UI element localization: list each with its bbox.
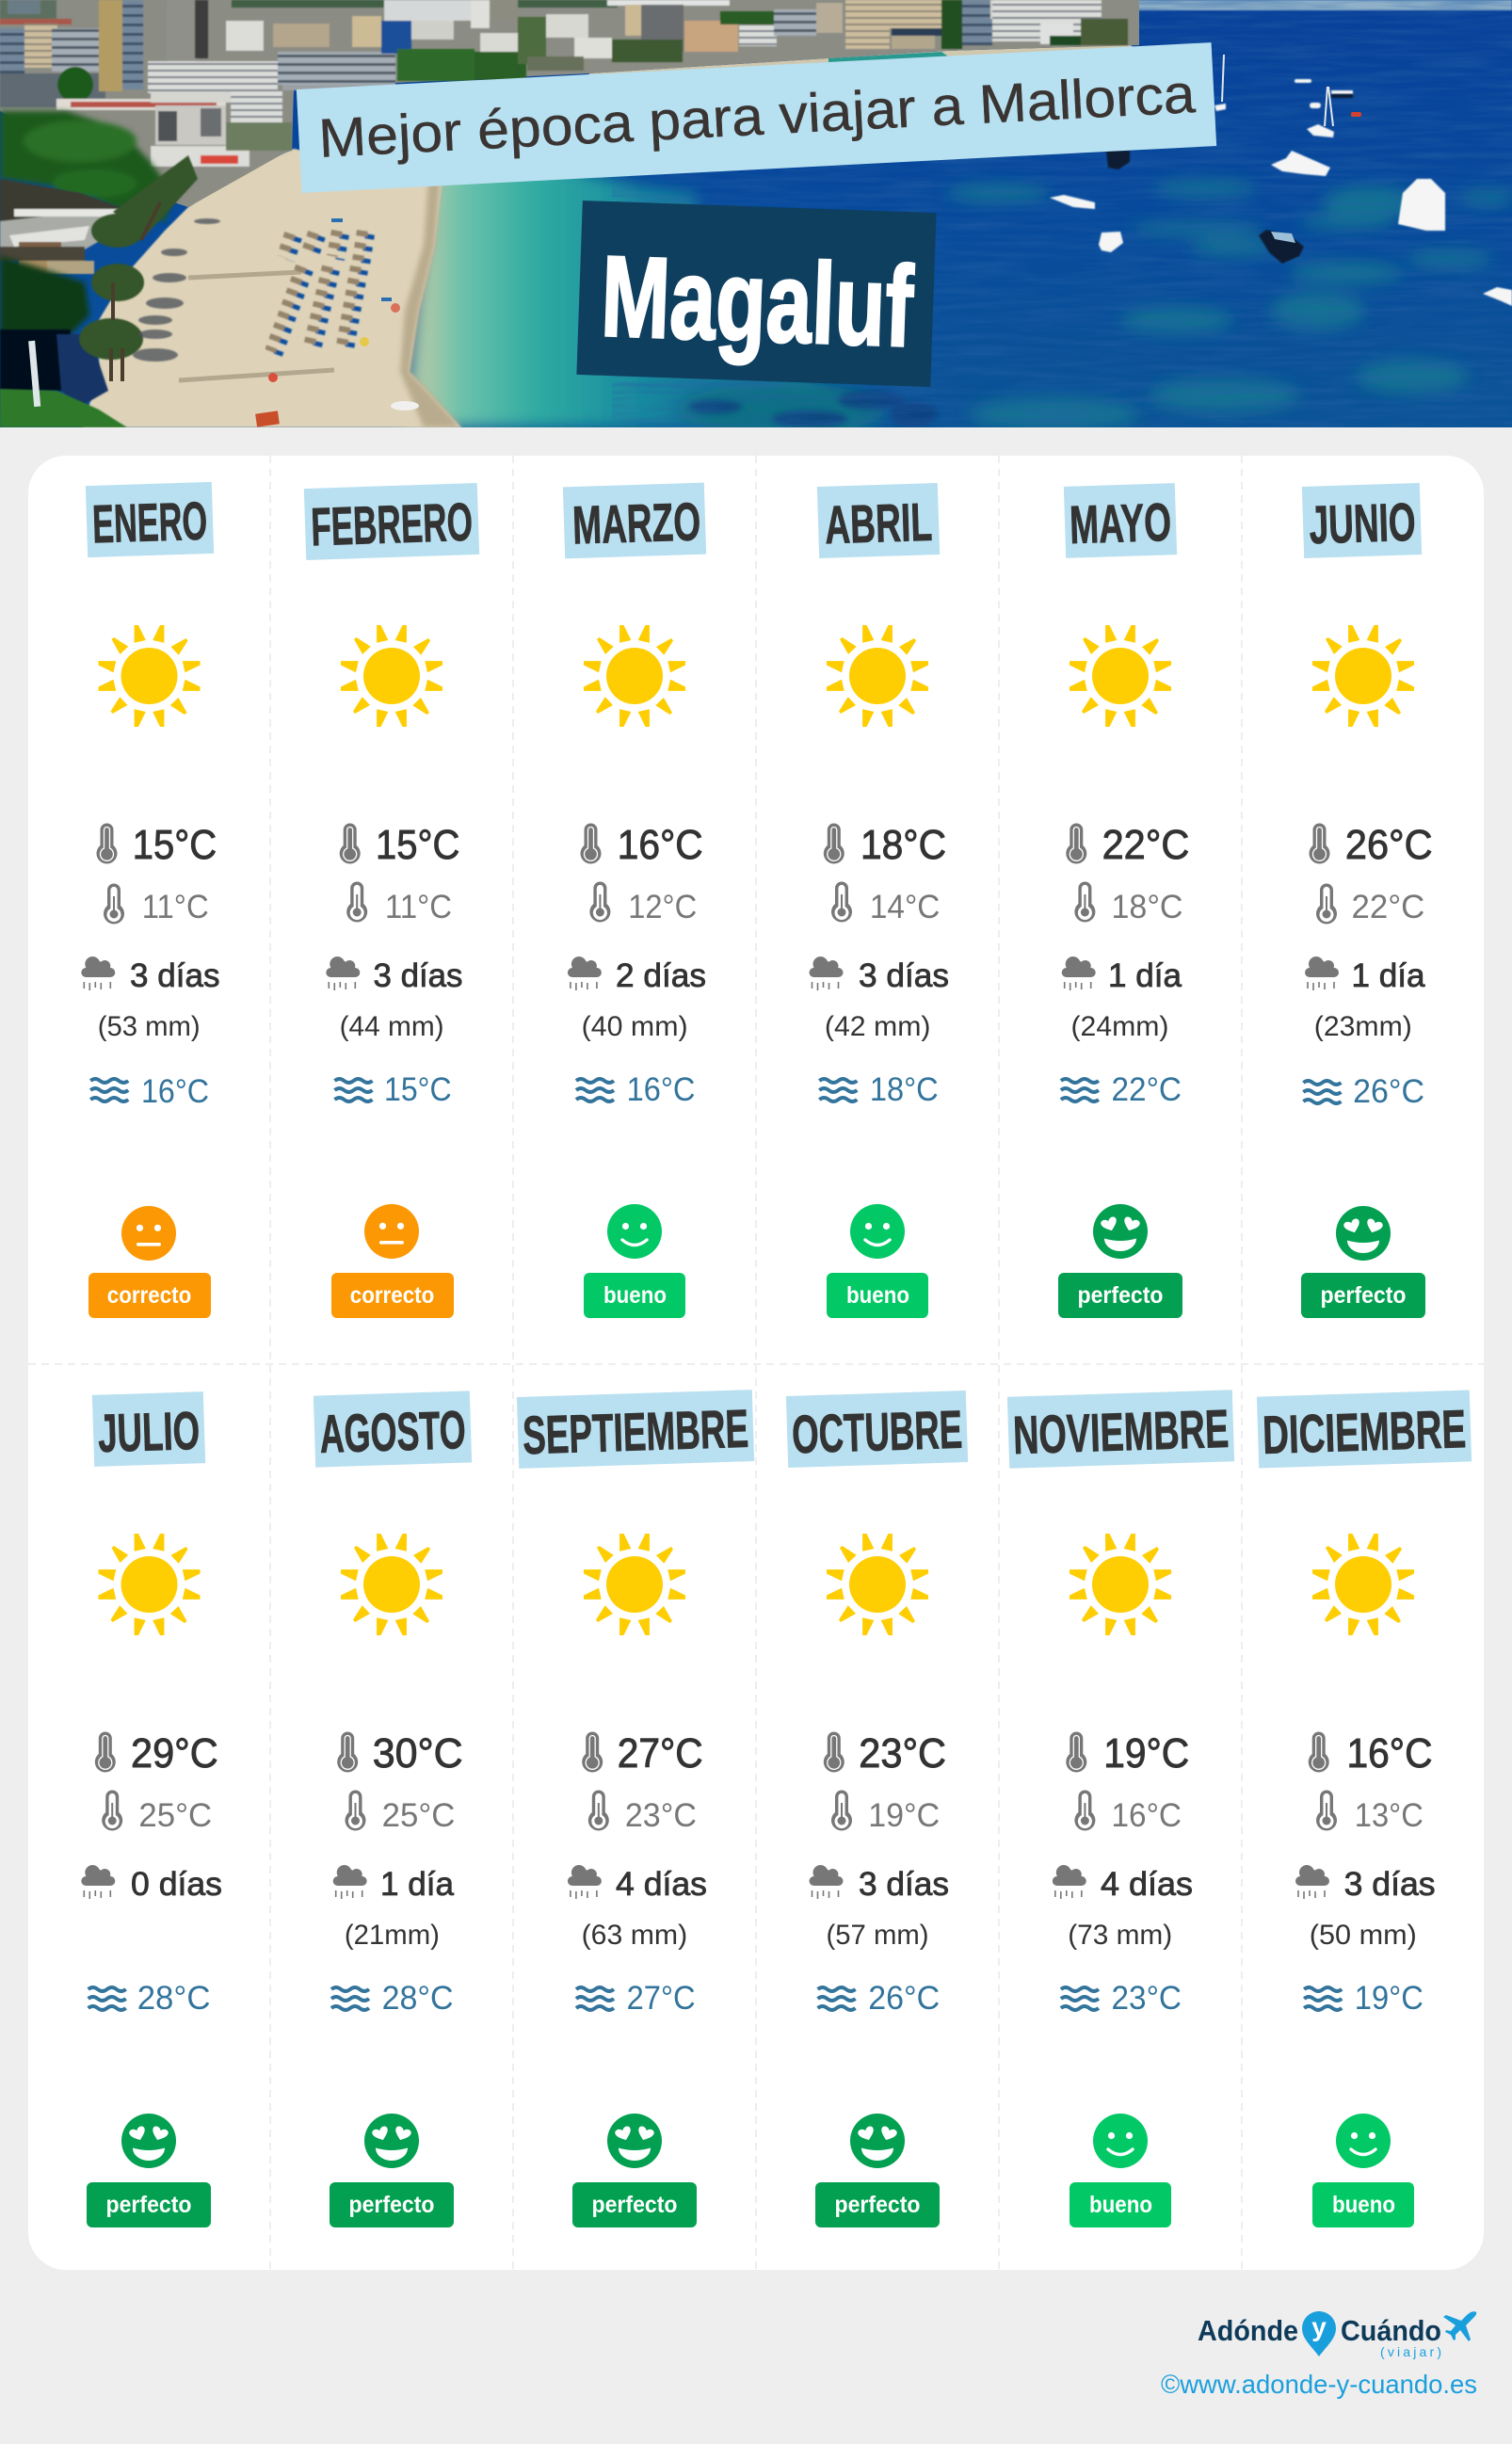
- rainy days: [568, 1865, 707, 1903]
- footer logo: Cuándo: [1341, 2314, 1441, 2347]
- sea temperature: [331, 1980, 454, 2017]
- min temperature: 18°C: [1111, 889, 1182, 925]
- rainy days: 1 día: [380, 1866, 455, 1903]
- rainy days: [1062, 957, 1182, 994]
- max temperature: 18°C: [861, 822, 946, 868]
- min temperature: 25°C: [382, 1797, 455, 1834]
- rating pill: [1301, 1273, 1425, 1318]
- rating pill: perfecto: [1320, 1282, 1407, 1309]
- rainy days: [81, 957, 220, 994]
- footer logo: Adónde: [1198, 2314, 1298, 2347]
- icon: sun: [341, 625, 442, 727]
- min temperature: [589, 881, 697, 925]
- month column: septiembre: [517, 1390, 754, 2227]
- rating face: [1093, 1204, 1148, 1259]
- month label: [786, 1391, 968, 1468]
- sea temperature: 15°C: [384, 1071, 452, 1108]
- max temperature: [824, 1730, 946, 1777]
- icon: sun: [1070, 1534, 1171, 1635]
- max temperature: [340, 822, 459, 868]
- rainy days: [1053, 1865, 1193, 1903]
- max temperature: 23°C: [859, 1730, 946, 1777]
- rating pill: correcto: [350, 1282, 434, 1309]
- max temperature: [582, 1730, 703, 1777]
- month column: agosto: [314, 1391, 472, 2227]
- max temperature: [1066, 1730, 1189, 1777]
- rainy days: [326, 957, 463, 994]
- sea temperature: [1061, 1980, 1182, 2017]
- min temperature: 25°C: [138, 1797, 212, 1834]
- sea temperature: 22°C: [1111, 1071, 1182, 1108]
- icon: sun: [584, 625, 685, 727]
- sea temperature: 26°C: [1353, 1073, 1424, 1110]
- min temperature: 16°C: [1111, 1797, 1182, 1834]
- rating pill: perfecto: [834, 2192, 921, 2218]
- month column: octubre: [786, 1391, 968, 2227]
- max temperature: [96, 822, 217, 868]
- icon: sun: [827, 625, 928, 727]
- rating face: [607, 2114, 662, 2168]
- rainfall: (57 mm): [827, 1920, 928, 1951]
- sea temperature: [1061, 1071, 1182, 1108]
- month label: [563, 483, 706, 558]
- icon: sun: [1312, 1534, 1414, 1635]
- max temperature: [580, 822, 703, 868]
- icon: sun: [341, 1534, 442, 1635]
- rating face: [1336, 2114, 1391, 2168]
- footer logo: (viajar): [1380, 2344, 1441, 2359]
- sea temperature: 28°C: [137, 1980, 211, 2017]
- rating face: [607, 1204, 662, 1259]
- sea temperature: [576, 1071, 695, 1108]
- rating pill: perfecto: [105, 2192, 192, 2218]
- rainy days: 3 días: [859, 1866, 949, 1903]
- rainfall: (73 mm): [1068, 1920, 1172, 1951]
- sea temperature: 18°C: [870, 1071, 939, 1108]
- min temperature: 14°C: [870, 889, 940, 925]
- min temperature: [102, 1791, 212, 1834]
- sea temperature: [1303, 1073, 1424, 1110]
- rainy days: 2 días: [616, 957, 706, 994]
- rainfall: (63 mm): [582, 1920, 687, 1951]
- rainy days: 4 días: [1101, 1866, 1193, 1903]
- rating pill: [572, 2182, 697, 2227]
- rainfall: (40 mm): [582, 1011, 688, 1042]
- rainfall: (24mm): [1071, 1011, 1169, 1042]
- rating face: [850, 1204, 905, 1259]
- rating pill: [827, 1273, 928, 1318]
- sea temperature: 28°C: [382, 1980, 454, 2017]
- rainy days: [81, 1865, 222, 1903]
- min temperature: [831, 881, 940, 925]
- rating pill: perfecto: [348, 2192, 435, 2218]
- sea temperature: [335, 1071, 452, 1108]
- rating face: [364, 1204, 419, 1259]
- rating face: [1093, 2114, 1148, 2168]
- min temperature: 11°C: [385, 889, 452, 925]
- max temperature: 16°C: [618, 822, 703, 868]
- max temperature: [824, 822, 946, 868]
- subtitle banner: Mejor época para viajar a Mallorca: [317, 63, 1198, 169]
- icon: sun: [584, 1534, 685, 1635]
- hero photo: Magaluf beach: [0, 0, 1512, 436]
- icon: sun: [98, 1534, 200, 1635]
- month column: enero: [81, 482, 220, 1318]
- rainy days: [810, 957, 949, 994]
- rating pill: [815, 2182, 940, 2227]
- min temperature: [831, 1791, 940, 1834]
- sea temperature: 16°C: [627, 1071, 695, 1108]
- month label: SEPTIEMBRE: [522, 1399, 749, 1466]
- rating pill: [1070, 2182, 1171, 2227]
- month label: [1064, 483, 1177, 558]
- rainy days: 1 día: [1352, 957, 1425, 994]
- sea temperature: 16°C: [141, 1073, 209, 1110]
- icon: sun: [98, 625, 200, 727]
- rating face: [364, 2114, 419, 2168]
- rating pill: [584, 1273, 685, 1318]
- sea temperature: [819, 1071, 939, 1108]
- icon: sun: [827, 1534, 928, 1635]
- rating face: [121, 2114, 176, 2168]
- min temperature: [1316, 883, 1424, 925]
- min temperature: [345, 1791, 455, 1834]
- icon: map pin: y: [1311, 2312, 1327, 2341]
- title banner: [576, 201, 937, 387]
- month label: [86, 482, 214, 557]
- icon: plane: [1443, 2311, 1476, 2341]
- rating pill: perfecto: [591, 2192, 678, 2218]
- rating pill: [331, 1273, 454, 1318]
- max temperature: 22°C: [1102, 822, 1189, 868]
- month column: julio: [81, 1391, 222, 2227]
- month label: [817, 483, 940, 558]
- month label: JUNIO: [1309, 492, 1417, 555]
- min temperature: 22°C: [1352, 889, 1424, 925]
- sea temperature: [90, 1073, 209, 1110]
- month column: marzo: [563, 483, 706, 1318]
- rainfall: (23mm): [1314, 1011, 1412, 1042]
- max temperature: [1309, 1730, 1433, 1777]
- month label: [1007, 1390, 1234, 1469]
- max temperature: 15°C: [376, 822, 459, 868]
- rating face: [1336, 1206, 1391, 1261]
- month label: [1302, 483, 1422, 558]
- sea temperature: 26°C: [868, 1980, 940, 2017]
- max temperature: 16°C: [1346, 1730, 1433, 1777]
- rainfall: (50 mm): [1310, 1920, 1417, 1951]
- sea temperature: [576, 1980, 696, 2017]
- rainy days: [810, 1865, 949, 1903]
- min temperature: [588, 1791, 697, 1834]
- rating pill: bueno: [603, 1282, 667, 1309]
- month label: [304, 483, 479, 560]
- month column: mayo: [1058, 483, 1189, 1318]
- rainy days: 3 días: [373, 957, 463, 994]
- month label: ABRIL: [824, 492, 933, 555]
- month label: AGOSTO: [319, 1400, 467, 1465]
- rating pill: perfecto: [1077, 1282, 1164, 1309]
- sea temperature: [88, 1980, 211, 2017]
- month label: NOVIEMBRE: [1012, 1399, 1230, 1466]
- sea temperature: [1304, 1980, 1424, 2017]
- min temperature: [1316, 1791, 1424, 1834]
- month column: abril: [810, 483, 949, 1318]
- month column: diciembre: [1257, 1390, 1472, 2227]
- min temperature: [1074, 1791, 1182, 1834]
- sea temperature: 27°C: [627, 1980, 696, 2017]
- month label: MARZO: [571, 491, 701, 556]
- min temperature: 11°C: [142, 889, 209, 925]
- rainy days: [333, 1865, 455, 1903]
- max temperature: [95, 1730, 218, 1777]
- min temperature: [1074, 881, 1182, 925]
- month label: [517, 1390, 754, 1469]
- footer url: ©www.adonde-y-cuando.es: [1161, 2370, 1477, 2399]
- rating pill: [88, 1273, 211, 1318]
- subtitle banner: [297, 42, 1216, 193]
- title banner: Magaluf: [599, 232, 915, 371]
- min temperature: [104, 883, 209, 925]
- min temperature: [346, 881, 452, 925]
- max temperature: 27°C: [618, 1730, 703, 1777]
- icon: sun: [1312, 625, 1414, 727]
- rainy days: 4 días: [616, 1866, 707, 1903]
- rainy days: 3 días: [859, 957, 949, 994]
- footer logo: [1198, 2311, 1476, 2359]
- min temperature: 13°C: [1355, 1797, 1424, 1834]
- month column: febrero: [304, 483, 479, 1318]
- rating face: [850, 2114, 905, 2168]
- rainy days: 0 días: [131, 1866, 222, 1903]
- rating face: [121, 1206, 176, 1261]
- rating pill: [1312, 2182, 1414, 2227]
- rainfall: (42 mm): [825, 1011, 930, 1042]
- min temperature: 12°C: [628, 889, 697, 925]
- sea temperature: [818, 1980, 940, 2017]
- rainy days: [1295, 1865, 1436, 1903]
- rainfall: (44 mm): [340, 1011, 444, 1042]
- sea temperature: 23°C: [1111, 1980, 1182, 2017]
- month column: junio: [1301, 483, 1433, 1318]
- month column: noviembre: [1007, 1390, 1234, 2227]
- max temperature: [1309, 822, 1433, 868]
- max temperature: 15°C: [133, 822, 217, 868]
- sea temperature: 19°C: [1355, 1980, 1424, 2017]
- rating pill: bueno: [846, 1282, 909, 1309]
- min temperature: 23°C: [625, 1797, 697, 1834]
- month label: JULIO: [97, 1401, 201, 1464]
- month label: OCTUBRE: [791, 1400, 963, 1465]
- rainy days: [568, 957, 706, 994]
- month label: FEBRERO: [310, 492, 474, 557]
- rating pill: bueno: [1332, 2192, 1395, 2218]
- min temperature: 19°C: [868, 1797, 940, 1834]
- rainfall: (53 mm): [98, 1011, 201, 1042]
- rating pill: bueno: [1089, 2192, 1152, 2218]
- calendar card: [28, 456, 1484, 2270]
- month label: [314, 1391, 472, 1468]
- max temperature: 30°C: [373, 1730, 463, 1777]
- rating pill: [87, 2182, 211, 2227]
- max temperature: 26°C: [1345, 822, 1433, 868]
- rainy days: 3 días: [1344, 1866, 1436, 1903]
- icon: map pin: [1302, 2311, 1336, 2356]
- rainfall: (21mm): [345, 1920, 440, 1951]
- month label: MAYO: [1069, 492, 1172, 555]
- max temperature: [1066, 822, 1189, 868]
- rating pill: [1058, 1273, 1182, 1318]
- rating pill: correcto: [107, 1282, 191, 1309]
- month label: [92, 1391, 205, 1467]
- rainy days: [1305, 957, 1425, 994]
- rainy days: 1 día: [1108, 957, 1182, 994]
- month label: ENERO: [91, 491, 208, 555]
- rating pill: [330, 2182, 454, 2227]
- icon: sun: [1070, 625, 1171, 727]
- max temperature: 19°C: [1103, 1730, 1189, 1777]
- max temperature: 29°C: [131, 1730, 218, 1777]
- rainy days: 3 días: [130, 957, 220, 994]
